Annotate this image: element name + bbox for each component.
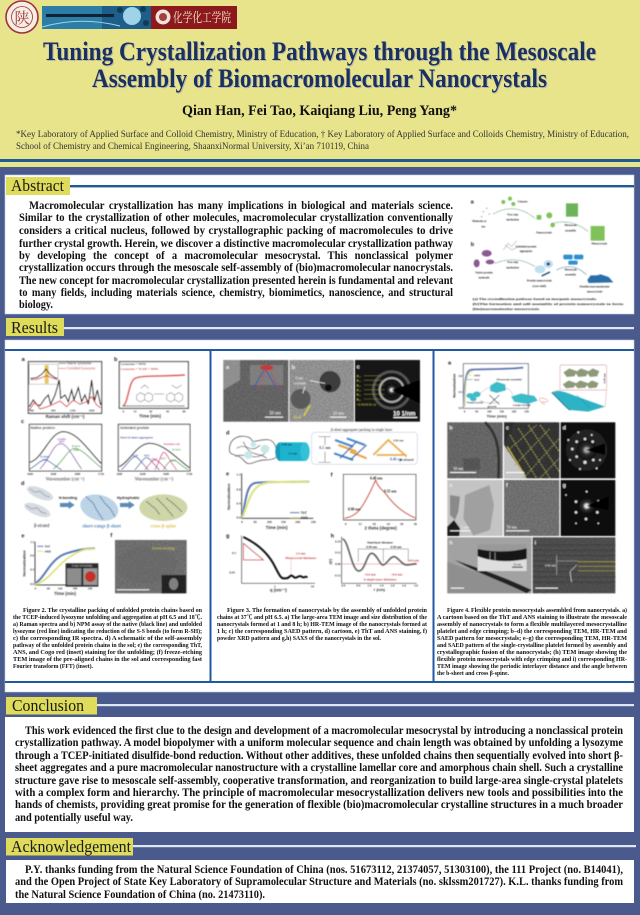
chart e: ThT and ANS staining: 150 xyxy=(281,520,286,524)
chart a: mesoscale assembly cartoon: 50 xyxy=(475,409,479,413)
chart c: IR spectra xyxy=(21,419,193,483)
image c: SAED pattern: c xyxy=(357,364,360,370)
chart b: NPM assay: 0 xyxy=(123,409,125,413)
chart b: NPM assay: Lysozyme + TCEP + NPM xyxy=(121,367,159,371)
image c: SAED pattern: R₁ₐ xyxy=(357,374,361,378)
chart c: IR spectra: 1640 xyxy=(140,472,146,476)
image c: HR-TEM with lattice: c xyxy=(506,426,509,432)
chart g: SAXS xyxy=(226,534,317,593)
chart b: NPM assay: b xyxy=(114,357,118,363)
chart a: Raman spectra: 1600 xyxy=(89,409,95,413)
caption: figure 2: Fourier transform (FFT) (inset). xyxy=(13,663,93,670)
abstract figure: crystallization pathways: Protein nanocrystals xyxy=(527,279,553,283)
caption: figure 2: c) the corresponding IR spectra. d) A schematic of the self-assembly xyxy=(13,635,203,642)
chart g: SAXS: 0.01 xyxy=(229,571,235,575)
chart g: SAXS: 1 xyxy=(274,584,276,588)
conclusion heading: Conclusion xyxy=(12,696,84,715)
cartoon d: 6.5 nm xyxy=(319,445,331,450)
image c: SAED pattern: R₆ₐ xyxy=(357,397,361,401)
chart a: Raman spectra: Native lysozyme xyxy=(67,362,92,366)
image a: large-area TEM xyxy=(223,360,288,422)
chart e: ThT and ANS staining: 180 xyxy=(73,586,78,590)
chart h: pair distribution: -0.12 xyxy=(334,573,341,577)
chart e: ThT and ANS staining: e xyxy=(226,472,229,478)
chart c: IR spectra: Wavenumber (cm⁻¹) xyxy=(135,477,174,483)
chart c: IR spectra: β-sheet xyxy=(40,454,50,458)
chart a: mesoscale assembly cartoon xyxy=(448,360,607,419)
chart h: pair distribution xyxy=(329,534,419,592)
image i: periodic lattice HR-TEM xyxy=(533,537,615,593)
caption: figure 4 xyxy=(437,607,627,677)
chart a: Raman spectra: 1200 xyxy=(70,409,76,413)
caption: figure 2: the TCEP-induced lysozyme unfolding and aggregation at pH 6.5 and 18℃. xyxy=(13,613,202,621)
header band xyxy=(0,0,640,167)
panel: conclusion: and potentially useful way. xyxy=(15,812,133,824)
chart e: ThT and ANS staining: 240 xyxy=(88,586,93,590)
chart c: IR spectra: 1600 xyxy=(116,472,123,476)
chart h: pair distribution: 1.0 xyxy=(367,584,372,588)
image b: HR-TEM xyxy=(289,360,354,422)
abstract text: to many fields, including materials science, chemistry, biomimetics, nanoscience, and structural xyxy=(19,287,453,299)
schematic d: self-assembly pathway: H-bonding xyxy=(59,496,77,500)
chart h: pair distribution: p(r) xyxy=(329,559,333,564)
abstract figure: crystallization pathways: (b)The formation and self-assembly of protein nanocrystals to form xyxy=(473,303,625,306)
caption: figure 4: the b-sheet and cross β-spine. xyxy=(437,670,509,677)
image f: HR-TEM: f xyxy=(506,483,508,489)
chart c: IR spectra: Wavenumber (cm⁻¹) xyxy=(46,477,85,483)
abstract figure: crystallization pathways: (core-shell) xyxy=(533,284,546,288)
logo: college of chemistry: 化学化工学院 xyxy=(173,7,231,26)
caption: figure 4: TEM image showing the periodic interlayer distance and the angle between xyxy=(437,663,627,670)
abstract figure: crystallization pathways: a xyxy=(471,199,475,205)
image c: SAED pattern: R₂ₐ xyxy=(357,379,361,383)
abstract figure: crystallization pathways: b xyxy=(471,242,475,248)
chart e: ThT and ANS staining: 0.4 xyxy=(236,501,241,505)
chart g: SAXS: Mesocrystal thickness xyxy=(285,556,317,560)
abstract text: considers a critical nucleus, followed by crystallographic packing of macromolecules to drive xyxy=(19,225,453,237)
caption: figure 4: assembly of nanocrystals to form a flexible multilayered mesocrystalline xyxy=(437,621,627,628)
abstract text: biology. xyxy=(19,299,53,311)
chart b: NPM assay: Lysozyme + NPM xyxy=(121,362,147,366)
chart e: ThT and ANS staining: ANS xyxy=(301,516,308,520)
chart e: ThT and ANS staining: Normalization xyxy=(22,550,27,576)
abstract figure: crystallization pathways: Mesocrystals xyxy=(591,242,608,246)
chart h: pair distribution: ~0.6 nm xyxy=(408,559,419,563)
figure 3 xyxy=(223,360,420,593)
image b: HR-TEM: Core xyxy=(295,376,303,381)
image f: freeze-etching TEM xyxy=(110,533,187,593)
image d: SAED xyxy=(561,422,615,478)
schematic d: self-assembly pathway xyxy=(21,481,187,529)
chart c: IR spectra: 1680 xyxy=(74,472,81,476)
image i: periodic lattice HR-TEM: 0.90 nm xyxy=(545,563,556,567)
chart e: ThT and ANS staining: 0 xyxy=(241,520,243,524)
chart e: ThT and ANS staining: 250 xyxy=(311,520,316,524)
abstract text: by developing the concept of a macromolecular mesocrystal. This nonclassical polymer xyxy=(19,250,453,262)
logo: university seal: 陕 xyxy=(14,7,30,28)
image f: freeze-etching TEM: freeze-etching xyxy=(152,545,175,550)
image h: crimped edge TEM xyxy=(447,537,532,593)
image c: SAED pattern xyxy=(355,360,420,422)
caption: figure 2: TEM image of the pre-aligned chains in the sol and corresponding fast xyxy=(13,656,203,663)
caption: figure 3 xyxy=(217,607,428,642)
abstract text: further crystal growth. Herein, we discover a distinctive macromolecular crystallization pathway xyxy=(19,238,453,250)
image f: HR-TEM: 50 nm xyxy=(507,524,518,529)
schematic d: self-assembly pathway: d xyxy=(21,481,25,487)
abstract figure: crystallization pathways: Unfolded protein xyxy=(516,245,537,249)
chart f: powder XRD: 30 xyxy=(400,522,404,526)
chart c: IR spectra: 1680 xyxy=(73,448,79,452)
chart c: IR spectra: 1600 xyxy=(27,472,33,476)
image h: crimped edge TEM: h xyxy=(449,540,453,546)
conclusion heading xyxy=(6,696,634,715)
chart e: ThT and ANS staining xyxy=(21,534,98,596)
chart b: NPM assay: Time (min) xyxy=(139,414,161,419)
chart e: ThT and ANS staining: ThT xyxy=(301,511,307,515)
image b: HR-TEM: 10 nm xyxy=(333,410,344,415)
caption: figure 3: chains at 37℃ and pH 6.5. a) The large-area TEM image and size distribution of the xyxy=(217,613,427,621)
chart f: powder XRD: 12 xyxy=(358,522,362,526)
chart e: ThT and ANS staining xyxy=(226,472,316,530)
caption: figure 2: Figure 2. The crystalline packing of unfolded protein chains based on xyxy=(23,607,202,614)
image e: platelet TEM: e xyxy=(449,483,452,489)
chart g: SAXS: q (nm⁻¹) xyxy=(270,588,287,593)
image b: HR-TEM: Shell xyxy=(293,414,302,419)
image c: SAED pattern: R₄ₐ xyxy=(357,388,361,392)
schematic d: self-assembly pathway: β-strand xyxy=(34,524,50,529)
image b: TEM: b xyxy=(449,426,453,432)
abstract figure: crystallization pathways: mesocrystals xyxy=(587,290,603,294)
affiliations: School of Chemistry and Chemical Engineering, ShaanxiNormal University, Xi’an 710119, China xyxy=(16,141,370,152)
chart c: IR spectra: Unfolded protein xyxy=(120,426,149,430)
chart e: ThT and ANS staining: Normalization xyxy=(226,483,231,510)
chart c: IR spectra: Random coil xyxy=(164,442,180,446)
image b: HR-TEM: crystals xyxy=(294,380,307,385)
abstract text: Macromolecular crystallization has many implications in biological and materials science. xyxy=(29,200,453,212)
chart c: IR spectra: c xyxy=(21,419,24,425)
chart e: ThT and ANS staining: 0.8 xyxy=(30,553,35,557)
logo: college of chemistry xyxy=(151,6,237,29)
chart c: IR spectra: 1720 xyxy=(98,472,104,476)
chart b: NPM assay xyxy=(114,357,188,419)
chart c: IR spectra: 1626 xyxy=(42,458,48,462)
image f: HR-TEM xyxy=(504,480,559,536)
abstract text: Similar to the crystallization of other molecules, macromolecular crystallization conventionally xyxy=(19,212,453,224)
chart c: IR spectra: 1661 xyxy=(152,457,158,461)
chart c: IR spectra: 1677 xyxy=(160,456,167,460)
caption: figure 4: SAED pattern for mesocrystals; e–g) the corresponding TEM, HR-TEM xyxy=(437,635,627,642)
chart c: IR spectra: 1641 xyxy=(144,454,150,458)
abstract figure: crystallization pathways: nucleation xyxy=(506,217,519,221)
abstract figure: crystallization pathways: assembly xyxy=(565,273,577,277)
chart g: SAXS: g xyxy=(226,534,230,540)
chart a: Raman spectra: 800 xyxy=(51,409,56,413)
chart c: IR spectra: 1720 xyxy=(186,472,193,476)
abstract figure: crystallization pathways: (a) The crystallization pathway based on inorganic mesocrystals; xyxy=(473,298,597,301)
cartoon d: 0.90 nm xyxy=(282,443,292,447)
title: Assembly of Biomacromolecular Nanocrystals xyxy=(93,64,548,94)
caption: figure 3: powder XRD pattern and g,h) SAXS of the nanocrystals in the sol. xyxy=(217,635,381,642)
caption: figure 2: pathway of the unfolded protein chains in the sol; e) the corresponding ThT, xyxy=(13,642,202,649)
chart a: mesoscale assembly cartoon: 250 xyxy=(524,409,529,413)
chart a: mesoscale assembly cartoon: growth xyxy=(487,405,497,409)
chart c: IR spectra: β-turn xyxy=(72,444,80,448)
chart h: pair distribution: ~0.6 nm xyxy=(391,572,403,576)
chart a: mesoscale assembly cartoon: 0 xyxy=(464,409,466,413)
panel: abstract xyxy=(5,175,634,314)
chart e: ThT and ANS staining: 0.0 xyxy=(30,582,35,586)
caption: figure 4: A cartoon based on the ThT and ANS staining to illustrate the mesoscale xyxy=(437,614,627,621)
abstract heading xyxy=(6,176,634,195)
image e: platelet TEM xyxy=(447,480,503,536)
image g: SAED: g xyxy=(563,483,566,489)
abstract figure: crystallization pathways: Flexible macromolecular xyxy=(580,284,610,288)
chart e: ThT and ANS staining: ThT xyxy=(45,545,50,549)
abstract figure: crystallization pathways xyxy=(471,197,625,311)
chart a: Raman spectra: a xyxy=(22,357,26,363)
abstract figure: crystallization pathways: nucleation xyxy=(506,265,519,269)
abstract figure: crystallization pathways: Mesoscale xyxy=(565,268,578,272)
chart h: pair distribution: 0.12 xyxy=(335,550,341,554)
abstract figure: crystallization pathways: (bio)macromolecular mesocrystals. xyxy=(473,308,541,311)
chart h: pair distribution: h xyxy=(331,534,335,540)
chart a: mesoscale assembly cartoon: Time (min) xyxy=(487,414,507,419)
cartoon d: d xyxy=(226,430,230,436)
image e: platelet TEM: 1 μm xyxy=(461,524,470,529)
chart h: pair distribution: 0.6 xyxy=(356,584,361,588)
chart e: ThT and ANS staining: 100 xyxy=(267,520,272,524)
title: Assembly of Biomacromolecular Nanocrystals xyxy=(92,63,547,93)
chart h: pair distribution: Interlayer distance xyxy=(367,541,393,545)
panel: acknowledgement xyxy=(6,860,634,903)
abstract heading: Abstract xyxy=(11,176,64,195)
chart a: mesoscale assembly cartoon: 200 xyxy=(512,409,517,413)
chart a: mesoscale assembly cartoon: Nanocrystals xyxy=(467,401,484,405)
chart a: mesoscale assembly cartoon: ThT xyxy=(474,378,480,382)
abstract figure: crystallization pathways: aggregates xyxy=(520,249,533,253)
chart e: ThT and ANS staining: e xyxy=(21,534,24,540)
chart c: IR spectra: 1629 xyxy=(132,454,138,458)
caption: figure 4: and SAED pattern of the single-crystalline platelet formed by assembly and xyxy=(437,642,627,649)
schematic d: self-assembly pathway: Hydrophobic xyxy=(117,496,140,500)
chart e: ThT and ANS staining: 0 xyxy=(35,586,37,590)
caption: figure 4: platelet and edge crimping; b–d) the corresponding TEM, HR-TEM and xyxy=(437,628,627,635)
results heading xyxy=(6,318,634,337)
caption: figure 4: Figure 4. Flexible protein mesocrystals assembled from nanocrystals. a) xyxy=(447,607,627,614)
abstract text xyxy=(19,200,453,311)
figure 4 xyxy=(447,360,615,593)
abstract figure: crystallization pathways: Nanocrystals xyxy=(536,230,553,234)
chart g: SAXS: 2.5 nm xyxy=(296,551,306,555)
chart a: Raman spectra xyxy=(22,357,102,419)
results heading: Results xyxy=(11,318,58,337)
chart c: IR spectra: 1680 xyxy=(163,472,169,476)
image d: SAED: d xyxy=(563,426,566,432)
chart a: mesoscale assembly cartoon: Mesoscale-assembly xyxy=(497,377,523,381)
schematic d: self-assembly pathway: cross β-spine xyxy=(151,524,176,529)
abstract figure: crystallization pathways: Mesoscale xyxy=(565,223,578,227)
chart e: ThT and ANS staining: Time (min) xyxy=(266,525,288,530)
chart f: powder XRD: 18 xyxy=(372,522,376,526)
abstract figure: crystallization pathways: molecule xyxy=(479,275,490,279)
image b: TEM xyxy=(447,422,503,478)
chart h: pair distribution: 2.6 xyxy=(402,584,406,588)
chart a: mesoscale assembly cartoon: Normalization xyxy=(452,374,456,398)
image c: SAED pattern: 10 1/nm xyxy=(393,412,415,418)
image b: TEM: 50 nm xyxy=(453,466,464,471)
caption: figure 2: a) Raman spectra and b) NPM assay of the native (black line) and unfolded xyxy=(13,621,202,628)
chart e: ThT and ANS staining: 0.8 xyxy=(236,487,241,491)
chart a: mesoscale assembly cartoon: 150 xyxy=(499,409,504,413)
chart h: pair distribution: 0.0 xyxy=(341,584,346,588)
chart e: ThT and ANS staining: 120 xyxy=(58,586,63,590)
abstract figure: crystallization pathways: Two-step xyxy=(507,213,519,217)
chart e: ThT and ANS staining: 50 xyxy=(253,520,257,524)
logo: university seal xyxy=(6,1,38,33)
cartoon d xyxy=(226,428,417,464)
image c: SAED pattern: ×2 4 6 8 10 12 xyxy=(357,403,376,407)
cartoon d: β-sheet xyxy=(400,457,414,462)
chart c: IR spectra: 1691 xyxy=(170,459,177,463)
chart a: mesoscale assembly cartoon: 0.8 xyxy=(459,374,463,378)
abstract figure: crystallization pathways: ion xyxy=(481,224,486,228)
chart a: mesoscale assembly cartoon: 100 xyxy=(487,409,492,413)
abstract figure: crystallization pathways: Clusters xyxy=(518,199,529,203)
chart a: Raman spectra: Raman shift (cm⁻¹) xyxy=(46,414,85,419)
chart a: mesoscale assembly cartoon: 0.4 xyxy=(459,390,463,394)
cartoon d: 2.5 nm xyxy=(288,451,297,455)
chart h: pair distribution: 0.90 nm xyxy=(366,545,377,549)
chart e: ThT and ANS staining: 1.2 xyxy=(236,473,241,477)
chart f: powder XRD: 2 theta (degree) xyxy=(365,526,397,531)
chart b: NPM assay: 15 xyxy=(133,409,137,413)
chart f: powder XRD: 0.48 nm xyxy=(370,477,382,481)
chart f: powder XRD xyxy=(331,472,417,531)
abstract figure: crystallization pathways: Native protein xyxy=(475,270,493,274)
chart h: pair distribution: 1.6 xyxy=(380,584,384,588)
cartoon d: 0.90 nm xyxy=(393,439,404,443)
image a: large-area TEM: 50 nm xyxy=(269,411,281,416)
cartoon d: 0.48 nm xyxy=(390,458,402,462)
chart a: Raman spectra: Unfolded lysozyme xyxy=(67,367,96,371)
chart c: IR spectra: Native protein xyxy=(31,426,55,430)
affiliations xyxy=(16,129,629,152)
chart e: ThT and ANS staining: 1.2 xyxy=(30,540,35,544)
chart g: SAXS: 0.1 xyxy=(232,551,236,555)
caption: figure 2: ANS, and Cogo red (inset) staining for the unfolding; (f) freeze-etching xyxy=(13,649,203,656)
authors: Qian Han, Fei Tao, Kaiqiang Liu, Peng Yang* xyxy=(182,103,457,119)
abstract figure: crystallization pathways: Two-step xyxy=(507,260,519,264)
chart f: powder XRD: 0.90 nm xyxy=(348,508,360,512)
caption: figure 2 xyxy=(13,607,203,670)
chart a: mesoscale assembly cartoon: 0.90 nm xyxy=(603,373,607,383)
chart e: ThT and ANS staining: Time (min) xyxy=(54,591,76,596)
schematic d: self-assembly pathway: short-range β-sheet xyxy=(82,524,121,529)
chart h: pair distribution: 0.24 xyxy=(335,539,341,543)
abstract figure: crystallization pathways: assembly xyxy=(565,228,577,232)
chart e: ThT and ANS staining: Congo red staining xyxy=(72,565,93,568)
abstract text: The new concept for macromolecular crystallization presented herein is fundamental and relevant xyxy=(19,275,453,287)
chart h: pair distribution: r (nm) xyxy=(374,587,386,592)
chart g: SAXS: 10 xyxy=(311,584,314,588)
image f: freeze-etching TEM: f xyxy=(110,533,112,539)
cartoon d: β-sheet aggregates packing in single layer xyxy=(331,428,393,432)
abstract figure: crystallization pathways: Molecule or xyxy=(472,219,487,223)
chart a: mesoscale assembly cartoon: Large-crystal xyxy=(513,403,530,407)
acknowledgement heading xyxy=(6,837,636,856)
caption: figure 2: lysozyme (red line) indicating the reduction of the S-S bonds (to form R-SH); xyxy=(13,628,202,635)
image g: SAED xyxy=(561,480,615,536)
abstract text: crystallization occurs through the mesoscale self-assembly of (bio)macromolecular nanocrystals. xyxy=(19,262,453,274)
image h: crimped edge TEM: 50 nm xyxy=(514,562,522,566)
chart c: IR spectra: α-helix xyxy=(57,437,67,441)
caption: figure 4: flexible protein mesocrystals with edge crimping and i) corresponding HR- xyxy=(437,656,627,663)
chart f: powder XRD: f xyxy=(331,472,333,478)
chart e: ThT and ANS staining: 0.4 xyxy=(30,567,35,571)
chart f: powder XRD: 24 xyxy=(387,522,390,526)
image b: HR-TEM: b xyxy=(292,365,296,371)
caption: figure 3: Figure 3. The formation of nanocrystals by the assembly of unfolded protein xyxy=(227,607,427,614)
logo: banner xyxy=(42,6,151,29)
panel: results xyxy=(5,340,634,692)
image a: large-area TEM: a xyxy=(226,365,230,371)
image c: SAED pattern: R₅ₐ xyxy=(357,393,361,397)
chart b: NPM assay: 60 xyxy=(182,409,186,413)
chart e: ThT and ANS staining: 60 xyxy=(47,586,50,590)
chart h: pair distribution: 0.90 nm xyxy=(391,545,402,549)
chart e: ThT and ANS staining: ANS xyxy=(45,550,51,554)
chart a: mesoscale assembly cartoon: 0.0 xyxy=(459,406,463,410)
chart h: pair distribution: 2.0 xyxy=(391,584,395,588)
chart f: powder XRD: 36 xyxy=(414,522,417,526)
caption: figure 3: 1 h; c) the corresponding SAED pattern, d) cartoon, e) ThT and ANS staining, f) xyxy=(217,628,427,635)
chart e: ThT and ANS staining: 200 xyxy=(295,520,300,524)
chart f: powder XRD: 0.35 nm xyxy=(384,489,396,493)
image i: periodic lattice HR-TEM: i xyxy=(535,540,537,546)
chart b: NPM assay: 30 xyxy=(149,409,153,413)
chart h: pair distribution: A single layer thickness xyxy=(363,577,397,581)
panel: conclusion xyxy=(5,717,634,832)
chart f: powder XRD: 6 xyxy=(345,522,347,526)
title xyxy=(43,36,597,94)
chart c: IR spectra: β-turn xyxy=(173,447,181,451)
chart h: pair distribution: ~0.6 nm xyxy=(364,572,376,576)
chart c: IR spectra: 1640 xyxy=(50,472,57,476)
chart a: mesoscale assembly cartoon: ANS xyxy=(474,373,480,377)
chart h: pair distribution: 3.0 xyxy=(414,584,418,588)
chart c: IR spectra: Short β-sheet aggregates xyxy=(120,436,154,440)
acknowledgement heading: Acknowledgement xyxy=(11,837,131,856)
chart b: NPM assay: 45 xyxy=(166,409,170,413)
image c: HR-TEM with lattice xyxy=(504,422,559,478)
panel: acknowledgement: the Natural Science Foundation of China (no. 21473110). xyxy=(15,889,265,901)
caption: figure 3: nanocrystals formed at 1 and 8 h; b) HR-TEM image of the nanocrystals formed at xyxy=(217,621,428,628)
chart a: Raman spectra: 480 xyxy=(29,409,34,413)
chart a: mesoscale assembly cartoon: a xyxy=(448,360,452,366)
chart c: IR spectra: 1651 xyxy=(59,440,65,444)
chart h: pair distribution: 0.00 xyxy=(335,562,341,566)
chart e: ThT and ANS staining: 0.0 xyxy=(236,515,241,519)
image c: SAED pattern: R₃ₐ xyxy=(357,383,361,387)
caption: figure 4: crystallographic fusion of the nanocrystals; (h) TEM image showing the xyxy=(437,649,627,656)
figure 2 xyxy=(21,357,193,596)
